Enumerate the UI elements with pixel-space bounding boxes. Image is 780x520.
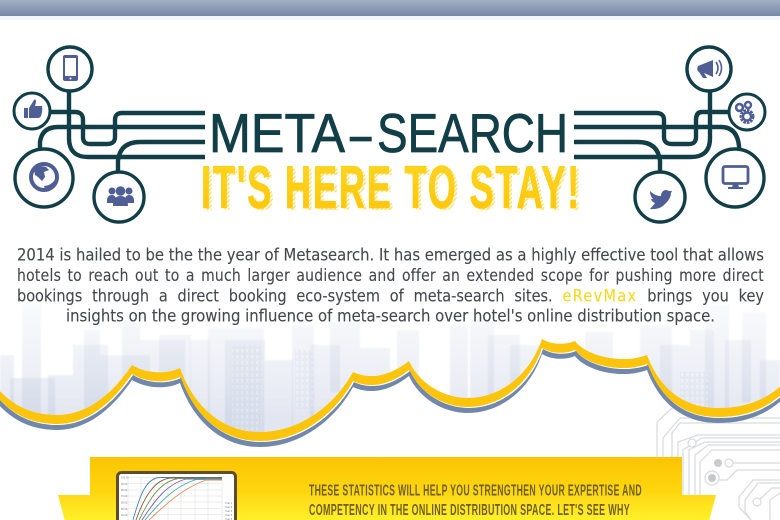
title: META-SEARCH — [209, 102, 568, 164]
icon: megaphone — [687, 47, 731, 91]
chart axis labels: 40.00 — [121, 514, 128, 517]
chart axis labels: 90.00 — [121, 483, 128, 486]
icon: desktop monitor — [706, 149, 764, 207]
icon: smartphone — [48, 47, 92, 91]
chart gridlines — [128, 477, 222, 520]
statistics chart on monitor — [118, 472, 236, 520]
intro paragraph: insights on the growing influence of meta-search over hotel's online distribution space. — [66, 306, 715, 326]
left connector lines — [40, 91, 205, 172]
icon: gears — [729, 94, 765, 130]
scalloped banner — [0, 339, 780, 520]
intro paragraph — [17, 246, 764, 326]
right connector lines — [574, 91, 739, 172]
icon: thumbs up — [14, 93, 50, 129]
icon: globe — [15, 149, 73, 207]
chart axis labels: 80.00 — [121, 489, 128, 492]
chart axis labels: 50.00 — [121, 508, 128, 511]
chart legend: Year 4 — [225, 514, 233, 517]
intro paragraph: bookings through a direct booking eco-system of meta-search sites. eRevMax brings you key — [17, 286, 764, 306]
circuit board decoration — [657, 408, 780, 520]
chart axis labels: 60.00 — [121, 502, 128, 504]
icon: twitter bird — [635, 172, 685, 222]
icon: people group — [94, 172, 144, 222]
title: META-SEARCH: SEARCH — [377, 102, 568, 164]
subtitle: It's here to stay — [201, 154, 584, 223]
chart axis labels — [121, 476, 129, 517]
yellow panel — [58, 457, 716, 520]
panel text — [309, 482, 642, 519]
top bar — [0, 0, 780, 20]
chart axis labels: 100.00 — [121, 476, 129, 480]
chart legend: Year 1 — [225, 502, 233, 505]
title: META-SEARCH: - — [346, 107, 375, 163]
chart legend: Year 3 — [225, 510, 233, 513]
chart curves — [133, 478, 222, 520]
chart axis labels: 70.00 — [121, 495, 128, 498]
skyline — [0, 318, 780, 432]
title: META-SEARCH: META — [209, 102, 345, 164]
chart legend — [225, 502, 233, 520]
chart legend: Year 2 — [225, 506, 233, 509]
